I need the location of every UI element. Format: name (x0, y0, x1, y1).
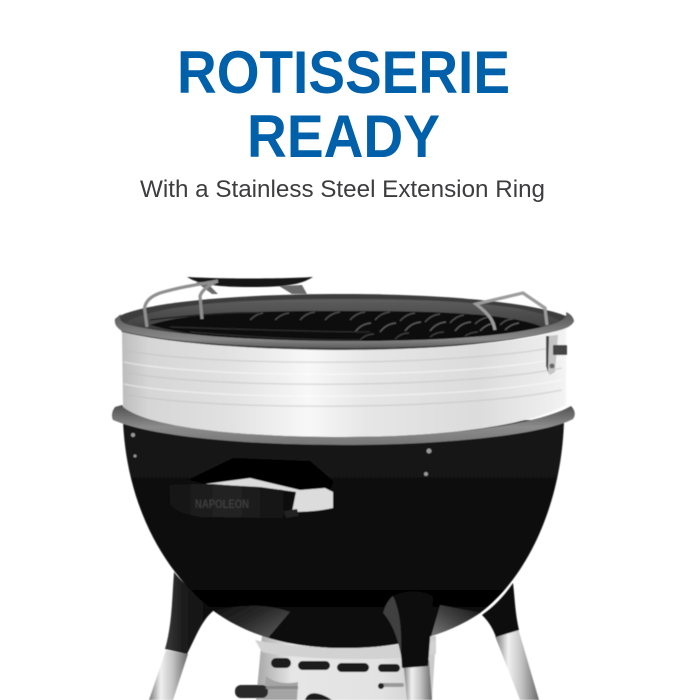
bowl (123, 420, 564, 648)
title: ROTISSERIE (177, 39, 510, 106)
side handle with logo: NAPOLEON (195, 497, 249, 511)
left leg (149, 572, 226, 700)
grill illustration (112, 277, 575, 700)
lower rim (112, 405, 575, 445)
steel extension ring (122, 325, 566, 437)
subtitle: With a Stainless Steel Extension Ring (140, 176, 545, 203)
extension ring inner and back wall (115, 294, 574, 350)
base: ash catcher housing (235, 636, 436, 700)
lid resting behind ring (187, 277, 313, 294)
side handle with logo (170, 458, 334, 518)
wire handle left (144, 281, 218, 327)
infographic canvas (111, 50, 576, 700)
title (177, 39, 510, 170)
title: READY (247, 103, 440, 170)
cooking grate (150, 311, 542, 344)
right leg (482, 583, 539, 700)
wire handle right (476, 293, 547, 330)
bowl highlights (217, 605, 483, 648)
middle leg (383, 592, 433, 700)
upper rim (115, 312, 574, 348)
brushed steel texture (124, 346, 562, 406)
ring side bracket (546, 335, 567, 375)
bowl rivets (131, 433, 432, 476)
